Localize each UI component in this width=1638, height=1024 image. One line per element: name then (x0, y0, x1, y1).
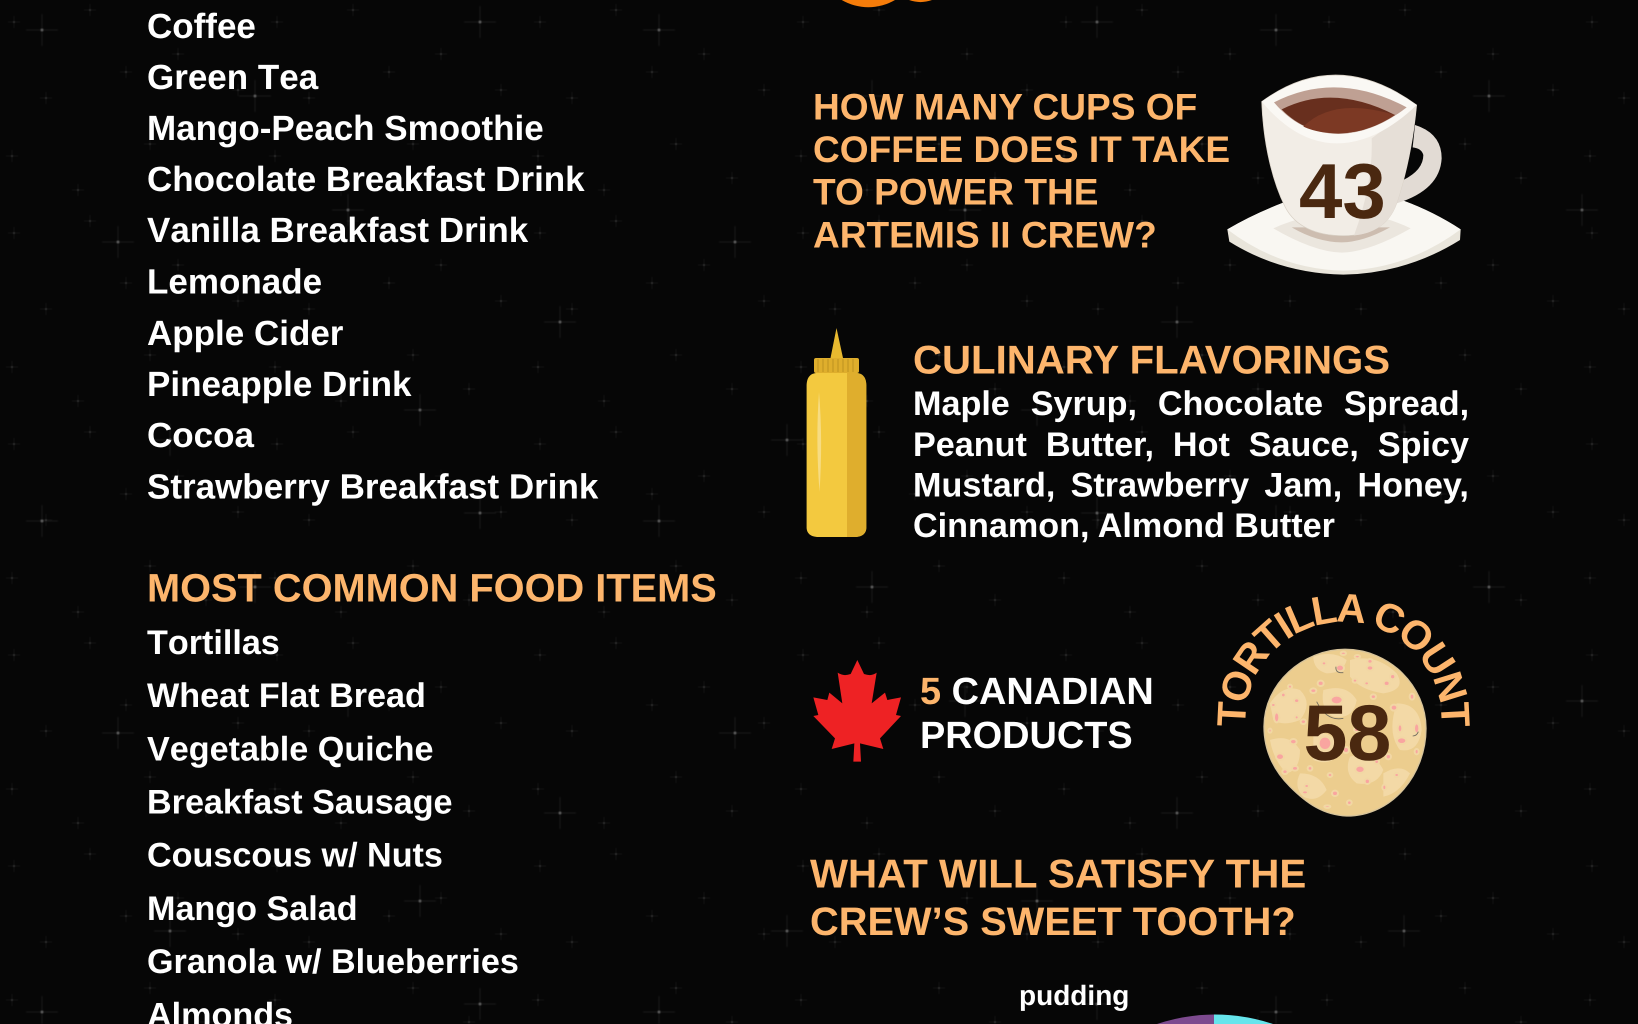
list: food items: Couscous w/ Nuts (147, 836, 443, 874)
list: drink items: Coffee (147, 7, 256, 46)
icon: coffee cup with count (1227, 75, 1461, 275)
heading: coffee question: COFFEE DOES IT TAKE (813, 128, 1230, 170)
icon: tortilla with count: 58 (1304, 688, 1391, 777)
heading: sweet tooth question: WHAT WILL SATISFY THE (810, 852, 1306, 897)
icon: tortilla with count (1264, 649, 1426, 816)
list: food items: Mango Salad (147, 890, 358, 928)
list: food items: Vegetable Quiche (147, 730, 434, 768)
list: food items: Tortillas (147, 624, 280, 662)
heading: sweet tooth question: CREW’S SWEET TOOTH? (810, 900, 1296, 944)
text block: flavorings list: Cinnamon, Almond Butter (913, 507, 1335, 545)
heading: coffee question: HOW MANY CUPS OF (813, 85, 1197, 127)
chart: sweets pie (1157, 1014, 1273, 1024)
text block: flavorings list: Peanut Butter, Hot Sauce, Spicy (913, 426, 1469, 464)
list: drink items: Green Tea (147, 58, 319, 97)
icon: orange circles at top edge (842, 0, 932, 7)
text block: flavorings list: Maple Syrup, Chocolate Spread, (913, 385, 1469, 423)
list: food items: Breakfast Sausage (147, 784, 453, 822)
list: food items: Wheat Flat Bread (147, 677, 426, 715)
text: 5 canadian products (920, 671, 1154, 757)
heading: most common food items: MOST COMMON FOOD ITEMS (147, 567, 717, 611)
text: 5 canadian products: 5 CANADIAN (920, 671, 1154, 713)
text block: flavorings list (913, 385, 1469, 545)
list: drink items: Vanilla Breakfast Drink (147, 211, 529, 250)
panel: culinary flavorings (913, 338, 1469, 545)
heading: sweet tooth question (810, 852, 1306, 944)
text: 5 canadian products: PRODUCTS (920, 715, 1133, 757)
heading: culinary flavorings: CULINARY FLAVORINGS (913, 338, 1390, 382)
list: food items (147, 624, 519, 1024)
icon: maple leaf (813, 660, 901, 762)
list: drink items: Chocolate Breakfast Drink (147, 160, 585, 199)
list: food items: Granola w/ Blueberries (147, 943, 519, 981)
list: drink items: Cocoa (147, 416, 254, 455)
list: drink items: Lemonade (147, 262, 322, 301)
heading: coffee question: ARTEMIS II CREW? (813, 213, 1157, 255)
list: drink items: Pineapple Drink (147, 365, 412, 404)
icon: coffee cup with count: 43 (1299, 147, 1386, 235)
text block: flavorings list: Mustard, Strawberry Jam, Honey, (913, 467, 1469, 505)
heading: tortilla count arc: TORTILLA COUNT (1217, 594, 1470, 726)
icon: mustard bottle (807, 328, 866, 537)
heading: coffee question (813, 85, 1230, 255)
list: drink items: Apple Cider (147, 314, 344, 353)
label: pudding: pudding (1019, 980, 1129, 1011)
list: drink items: Mango-Peach Smoothie (147, 109, 544, 148)
list: drink items: Strawberry Breakfast Drink (147, 467, 599, 506)
heading: coffee question: TO POWER THE (813, 170, 1098, 212)
list: drink items (147, 7, 599, 506)
